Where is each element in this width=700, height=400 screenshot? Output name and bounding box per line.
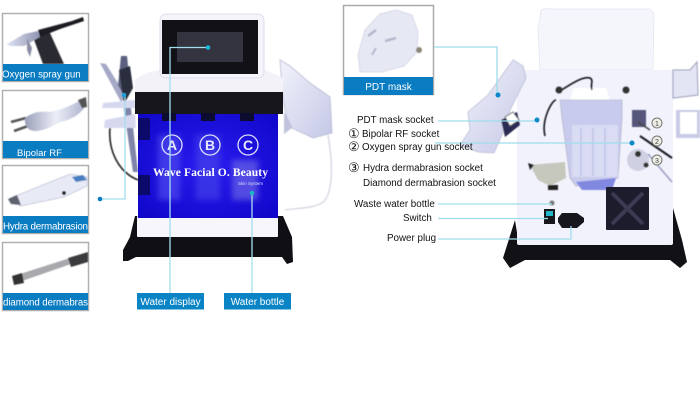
label: diamond dermabrasion: diamond dermabras: [3, 298, 88, 308]
socket labels: Power plug: [387, 233, 436, 244]
waste bottle: [544, 78, 630, 190]
icon: diamond handpiece: [12, 252, 88, 285]
callout: water bottle: Water bottle: [231, 297, 285, 308]
socket labels: Oxygen spray gun socket: [362, 142, 473, 153]
leader lines: front: [100, 48, 252, 293]
leader dots: front: [98, 45, 254, 201]
machine body: [123, 216, 293, 264]
label: oxygen spray gun: Oxygen spray gun: [2, 70, 81, 80]
icon: hydra handpiece: [8, 174, 87, 206]
power plug: [558, 213, 584, 228]
top housing: [538, 9, 654, 70]
callout: water display: Water display: [140, 297, 201, 308]
leader lines: back: [434, 47, 632, 239]
label: hydra dermabrasion: Hydra dermabrasion: [3, 222, 88, 232]
label: bipolar RF: Bipolar RF: [17, 148, 62, 159]
socket labels: ②: [348, 139, 360, 154]
illustration: front of machine: C: [243, 137, 253, 153]
mask and cable: [280, 60, 332, 210]
socket labels: Diamond dermabrasion socket: [363, 178, 496, 189]
socket labels: [348, 115, 496, 244]
switch: [544, 209, 555, 224]
illustration: back of machine: 2: [655, 139, 659, 146]
panel: PDT mask: PDT mask: [365, 82, 413, 93]
panel: oxygen spray gun: [2, 14, 88, 82]
illustration: front of machine: B: [205, 137, 215, 153]
filter: [528, 162, 566, 206]
machine base: [503, 208, 687, 268]
brand text: Wave Facial O. Beauty: [153, 167, 268, 179]
leader dots: back: [496, 92, 634, 146]
sockets: [627, 110, 672, 182]
icon: oxygen spray gun: [7, 17, 84, 64]
bottle labels A B C: [162, 135, 258, 155]
illustration: back of machine: 3: [655, 158, 659, 165]
back panel: [517, 70, 673, 245]
mask on back: [460, 60, 526, 153]
panel: hydra dermabrasion: [2, 166, 88, 234]
illustration: back of machine: [460, 9, 700, 268]
socket labels: Bipolar RF socket: [362, 129, 440, 140]
icon: PDT mask: [358, 10, 422, 72]
bottles: [158, 135, 258, 200]
socket numbers: [652, 118, 662, 165]
handpiece holder: [100, 56, 138, 180]
socket labels: Hydra dermabrasion socket: [363, 163, 483, 174]
illustration: front of machine: Skin System: [238, 181, 263, 186]
socket labels: Switch: [403, 213, 432, 224]
icon: bipolar RF handpiece: [11, 97, 87, 131]
panel: diamond dermabrasion: [2, 242, 88, 310]
side hooks: [673, 62, 700, 138]
socket labels: PDT mask socket: [357, 115, 434, 126]
illustration: front of machine: A: [167, 137, 177, 153]
fan: [606, 187, 649, 230]
socket labels: ③: [348, 160, 360, 175]
callout: water display: [137, 293, 204, 310]
callout: water bottle: [224, 293, 291, 310]
panel: bipolar RF: [2, 90, 88, 159]
illustration: front of machine: [100, 14, 332, 264]
panel: PDT mask: [344, 6, 434, 95]
illustration: back of machine: 1: [655, 121, 659, 128]
socket labels: Waste water bottle: [354, 199, 435, 210]
socket labels: ①: [348, 126, 360, 141]
